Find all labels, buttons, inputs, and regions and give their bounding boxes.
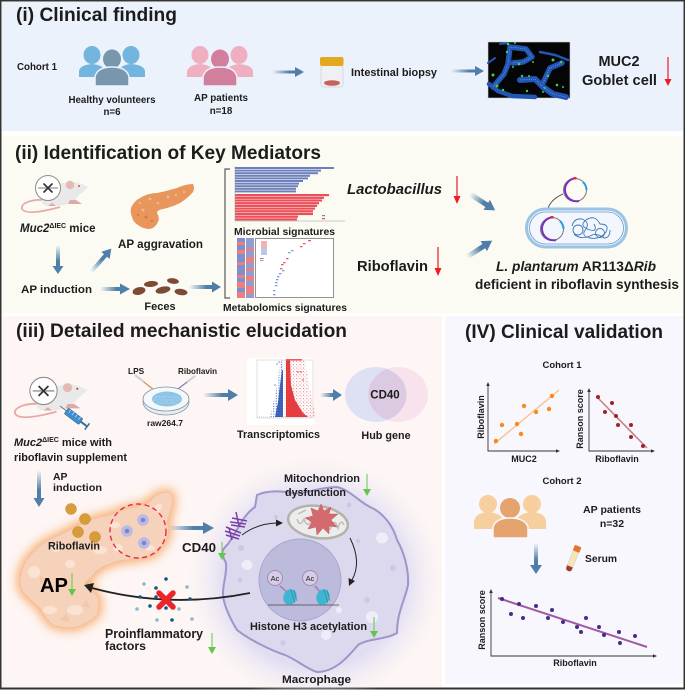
icon: mouse with syringe (15, 377, 90, 430)
chart: volcano plot (247, 358, 316, 425)
label: AP patients n=32: n=32 (600, 518, 624, 530)
label: macrophage: Macrophage (282, 674, 351, 686)
chart: ranson score vs riboflavin: Ranson score (575, 389, 585, 449)
arrow: to signatures (189, 282, 221, 292)
label: riboflavin: Riboflavin (357, 259, 428, 275)
label: Muc2 mice with supplement: riboflavin supplement (14, 452, 127, 464)
label: AP induction: AP (53, 472, 68, 483)
panel: detailed mechanistic elucidation (2, 316, 445, 690)
histones: Ac (306, 574, 315, 583)
label: MUC2 goblet cell (582, 54, 657, 89)
label: cohort 1: Cohort 1 (17, 62, 58, 73)
mitochondrion (286, 502, 350, 542)
icon: riboflavin balls (66, 504, 100, 542)
chart: riboflavin vs MUC2: MUC2 (511, 454, 537, 464)
label: AP patients: AP patients (194, 93, 249, 104)
label: AP patients n=32: AP patients (583, 504, 641, 516)
label: MUC2 goblet cell: Goblet cell (582, 73, 657, 89)
histones: Ac (271, 574, 280, 583)
label: AP induction: induction (53, 483, 102, 494)
label: healthy volunteers: Healthy volunteers (68, 95, 156, 106)
chart: riboflavin vs MUC2: Riboflavin (476, 395, 486, 439)
label: strain (475, 259, 679, 292)
micrograph (488, 42, 570, 98)
arrow (451, 66, 484, 76)
label: cohort 1: Cohort 1 (542, 360, 582, 371)
label: metabolomics signatures: Metabolomics signatures (223, 303, 347, 314)
label: mitochondrion dysfunction: Mitochondrion (284, 473, 360, 485)
arrow: AP induction down (34, 470, 44, 507)
cell: macrophage (222, 487, 408, 672)
venn diagram (345, 367, 428, 422)
pancreas glow (20, 492, 173, 628)
label: cohort 2: Cohort 2 (542, 476, 582, 487)
icon: feces (132, 277, 188, 296)
label: histone acetylation: Histone H3 acetylation (250, 621, 367, 633)
heading: clinical validation: (IV) Clinical validation (465, 322, 663, 343)
label: AP patients: n=18 (210, 106, 233, 117)
arrow: green down (208, 633, 216, 654)
label: mitochondrion dysfunction (284, 473, 360, 499)
bracket (225, 169, 230, 298)
label: proinflammatory factors: factors (105, 639, 146, 653)
arrow: mitochondrion to nucleus (348, 538, 357, 586)
arrow: to hub gene (320, 389, 342, 401)
label: transcriptomics: Transcriptomics (237, 429, 320, 441)
chart: ranson score vs riboflavin cohort 2: Riboflavin (553, 658, 597, 668)
heading: clinical finding: (i) Clinical finding (16, 5, 177, 26)
arrow: to transcriptomics (203, 389, 238, 401)
arrow: red down (454, 176, 460, 204)
label: healthy volunteers (68, 95, 156, 118)
icon: knockout mouse (22, 176, 88, 212)
label: feces: Feces (144, 301, 176, 313)
icon: AP patients (187, 46, 253, 86)
icon: CD40 receptors (225, 512, 247, 540)
nucleus (259, 539, 341, 621)
heading: identification of key mediators: (ii) Identification of Key Mediators (15, 143, 321, 164)
label: Muc2 mice with supplement: ΔIEC (42, 437, 59, 444)
label: MUC2 goblet cell: MUC2 (598, 54, 640, 70)
arrow: down (530, 543, 542, 574)
chart: ranson score vs riboflavin cohort 2: Ranson score (477, 590, 487, 650)
chart: metabolomics signatures (237, 238, 334, 298)
proinflammatory factors dots (135, 577, 194, 622)
label: CD40: CD40 (370, 390, 400, 402)
icon: pancreas with inflammation (20, 492, 173, 628)
label: Muc2 mice: mice (66, 223, 96, 235)
chart: microbial signatures bars (235, 166, 345, 221)
label: Muc2 mice with supplement: Muc2 (14, 437, 42, 449)
icon: engineered bacterium (526, 177, 626, 247)
icon: cell culture dish (135, 375, 195, 415)
label: mitochondrion dysfunction: dysfunction (285, 487, 346, 499)
arrow: to feces (100, 284, 130, 294)
label: Muc2 mice: Muc2 (20, 223, 50, 235)
immune cells (121, 514, 150, 549)
macrophage glow (185, 455, 445, 690)
arrow: riboflavin to strain (464, 236, 495, 262)
label: Muc2 mice: ΔIEC (49, 223, 66, 230)
label: riboflavin: Riboflavin (48, 540, 100, 552)
arrow: lactobacillus to strain (467, 189, 498, 215)
label: microbial signatures: Microbial signatures (234, 227, 335, 238)
label: AP patients (194, 93, 249, 117)
icon: healthy volunteers (79, 46, 145, 86)
icon: pancreas (131, 184, 194, 229)
arrow: to macrophage (169, 522, 214, 534)
arrow: green down (218, 542, 226, 560)
label: Muc2 mice with supplement (14, 437, 127, 464)
arrow: CD40 to mitochondrion (242, 520, 283, 535)
label: strain: L. plantarum AR113ΔRib (496, 259, 656, 274)
icon: serum tube (565, 545, 581, 572)
histones (268, 570, 339, 607)
icon: red cross (159, 593, 173, 607)
arrow: to AP aggravation (87, 245, 115, 276)
label: hub gene: Hub gene (361, 430, 411, 442)
label: intestinal biopsy: Intestinal biopsy (351, 67, 437, 79)
chart: ranson score vs riboflavin: Riboflavin (595, 454, 639, 464)
label: AP aggravation: AP aggravation (118, 238, 203, 251)
label: AP patients n=32 (583, 504, 641, 530)
label: AP: AP (40, 575, 68, 597)
label: raw264.7: raw264.7 (147, 418, 183, 428)
heading: detailed mechanistic elucidation: (iii) Detailed mechanistic elucidation (16, 321, 347, 342)
label: serum: Serum (585, 554, 617, 565)
chart: ranson score vs riboflavin cohort 2 (477, 589, 657, 668)
arrow: green down (370, 617, 378, 638)
chart: ranson score vs riboflavin (575, 388, 655, 464)
panel: clinical validation (445, 316, 683, 684)
icon: AP patients cohort 2 (474, 495, 546, 538)
label: proinflammatory factors: Proinflammatory (105, 627, 203, 641)
label: strain: deficient in riboflavin synthesis (475, 277, 679, 292)
chart: riboflavin vs MUC2 (476, 382, 560, 464)
label: healthy volunteers: n=6 (104, 107, 121, 118)
arrow: red down (434, 247, 442, 276)
arrow: red down (664, 57, 672, 86)
dashed inflammation circle (110, 504, 166, 558)
arrow: down (52, 245, 64, 274)
arrow: macrophage to pancreas (84, 583, 250, 600)
label: CD40: CD40 (182, 540, 216, 555)
arrow: green down (363, 474, 371, 496)
label: AP induction: AP induction (21, 284, 92, 296)
panel: clinical finding (2, 2, 683, 131)
label: AP induction (53, 472, 102, 494)
label: Lactobacillus: Lactobacillus (347, 182, 442, 198)
label: LPS: LPS (128, 366, 145, 376)
label: Muc2 mice with supplement: mice with (59, 437, 112, 449)
label: riboflavin reagent: Riboflavin (178, 367, 217, 376)
icon: biopsy jar (320, 57, 344, 87)
arrow (272, 67, 304, 77)
panel: identification of key mediators (2, 136, 683, 314)
label: proinflammatory factors (105, 627, 203, 653)
arrow: green down (68, 573, 76, 596)
